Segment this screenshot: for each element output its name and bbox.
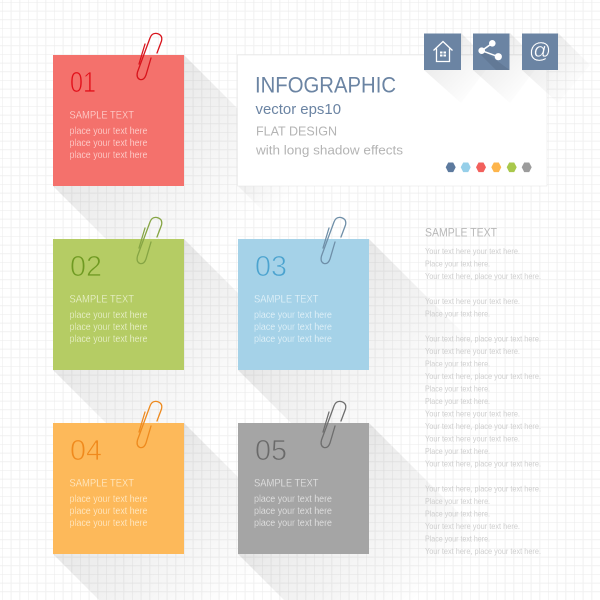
panel: card 03 blue: place your text here bbox=[254, 322, 332, 333]
icon: at sign: @ bbox=[529, 38, 551, 63]
panel: card 03 blue: SAMPLE TEXT bbox=[254, 294, 319, 306]
panel: card 01 red bbox=[53, 55, 184, 186]
panel: card 04 orange bbox=[53, 423, 184, 554]
panel: card 01 red: place your text here bbox=[70, 138, 148, 149]
panel: card 03 blue bbox=[238, 239, 369, 370]
panel: card 05 gray: place your text here bbox=[254, 506, 332, 517]
text block: right column: Your text here your text here. bbox=[425, 434, 520, 444]
panel: card 04 orange: place your text here bbox=[70, 506, 148, 517]
panel: card 04 orange: place your text here bbox=[70, 518, 148, 529]
text block: right column: Place your text here. bbox=[425, 510, 490, 518]
icon: gray paper clip bbox=[321, 401, 346, 448]
panel: card 02 green: place your text here bbox=[70, 310, 148, 321]
panel: white title card bbox=[238, 55, 547, 186]
text block: flat design bbox=[255, 125, 403, 158]
text block: right column: Your text here your text here. bbox=[425, 297, 520, 306]
panel: card 02 green: 02 bbox=[70, 251, 102, 283]
text block: right column: Your text here, place your text here. bbox=[425, 422, 541, 431]
icon: green paper clip bbox=[137, 217, 162, 264]
text block: right column: Your text here, place your text here. bbox=[425, 334, 541, 344]
text block: right column bbox=[425, 226, 541, 556]
panel: card 05 gray: place your text here bbox=[254, 494, 332, 505]
panel: card 04 orange: SAMPLE TEXT bbox=[70, 478, 134, 490]
title: INFOGRAPHIC bbox=[255, 73, 396, 98]
panel: card 01 red: SAMPLE TEXT bbox=[70, 110, 134, 122]
panel: card 05 gray: 05 bbox=[255, 435, 287, 467]
text block: right column: Your text here, place your text here. bbox=[425, 547, 541, 556]
panel: card 01 red: place your text here bbox=[70, 150, 148, 161]
icon: red paper clip bbox=[137, 33, 162, 80]
text block: right column: Your text here, place your text here. bbox=[425, 372, 541, 381]
icon: at sign bbox=[522, 34, 558, 70]
panel: card 03 blue: place your text here bbox=[254, 310, 332, 321]
text block: right column: Place your text here. bbox=[425, 497, 490, 506]
long shadows of the cards bbox=[53, 55, 479, 600]
text block: right column: SAMPLE TEXT bbox=[425, 226, 497, 240]
panel: card 01 red: 01 bbox=[70, 67, 96, 99]
text block: right column: Place your text here. bbox=[425, 534, 490, 544]
text block: right column: Place your text here. bbox=[425, 447, 490, 456]
panel: card 02 green: place your text here bbox=[70, 334, 148, 345]
panel: card 02 green: SAMPLE TEXT bbox=[70, 294, 134, 306]
panel: card 02 green bbox=[53, 239, 184, 370]
panel: card 05 gray: SAMPLE TEXT bbox=[254, 478, 319, 490]
text block: flat design: with long shadow effects bbox=[255, 144, 403, 158]
text block: right column: Your text here your text here. bbox=[425, 247, 520, 256]
text block: right column: Place your text here. bbox=[425, 384, 490, 394]
icon shadows bbox=[424, 33, 590, 103]
icon: orange paper clip bbox=[137, 401, 162, 448]
panel: card 04 orange: place your text here bbox=[70, 494, 148, 505]
icon: share bbox=[473, 34, 510, 70]
icon: blue paper clip bbox=[321, 217, 346, 264]
text block: flat design: FLAT DESIGN bbox=[256, 125, 337, 139]
panel: card 04 orange: 04 bbox=[70, 435, 102, 467]
icon: home bbox=[424, 34, 461, 70]
text block: right column: Your text here your text here. bbox=[425, 522, 520, 531]
text block: right column: Place your text here. bbox=[425, 360, 490, 368]
text block: right column: Your text here, place your text here. bbox=[425, 484, 541, 494]
subtitle: vector eps10 bbox=[256, 101, 341, 118]
panel: card 01 red: place your text here bbox=[70, 126, 148, 137]
panel: card 05 gray bbox=[238, 423, 369, 554]
colour dots bbox=[446, 162, 532, 172]
text block: right column: Your text here, place your text here. bbox=[425, 272, 541, 281]
panel: card 05 gray: place your text here bbox=[254, 518, 332, 529]
panel: card 02 green: place your text here bbox=[70, 322, 148, 333]
panel: card 03 blue: place your text here bbox=[254, 334, 332, 345]
text block: right column: Place your text here. bbox=[425, 310, 490, 318]
text block: right column: Your text here, place your text here. bbox=[425, 460, 541, 468]
text block: right column: Place your text here. bbox=[425, 260, 490, 268]
text block: right column: Your text here your text here. bbox=[425, 347, 520, 356]
text block: right column: Your text here your text here. bbox=[425, 410, 520, 418]
text block: right column: Place your text here. bbox=[425, 397, 490, 406]
panel: card 03 blue: 03 bbox=[255, 251, 287, 283]
